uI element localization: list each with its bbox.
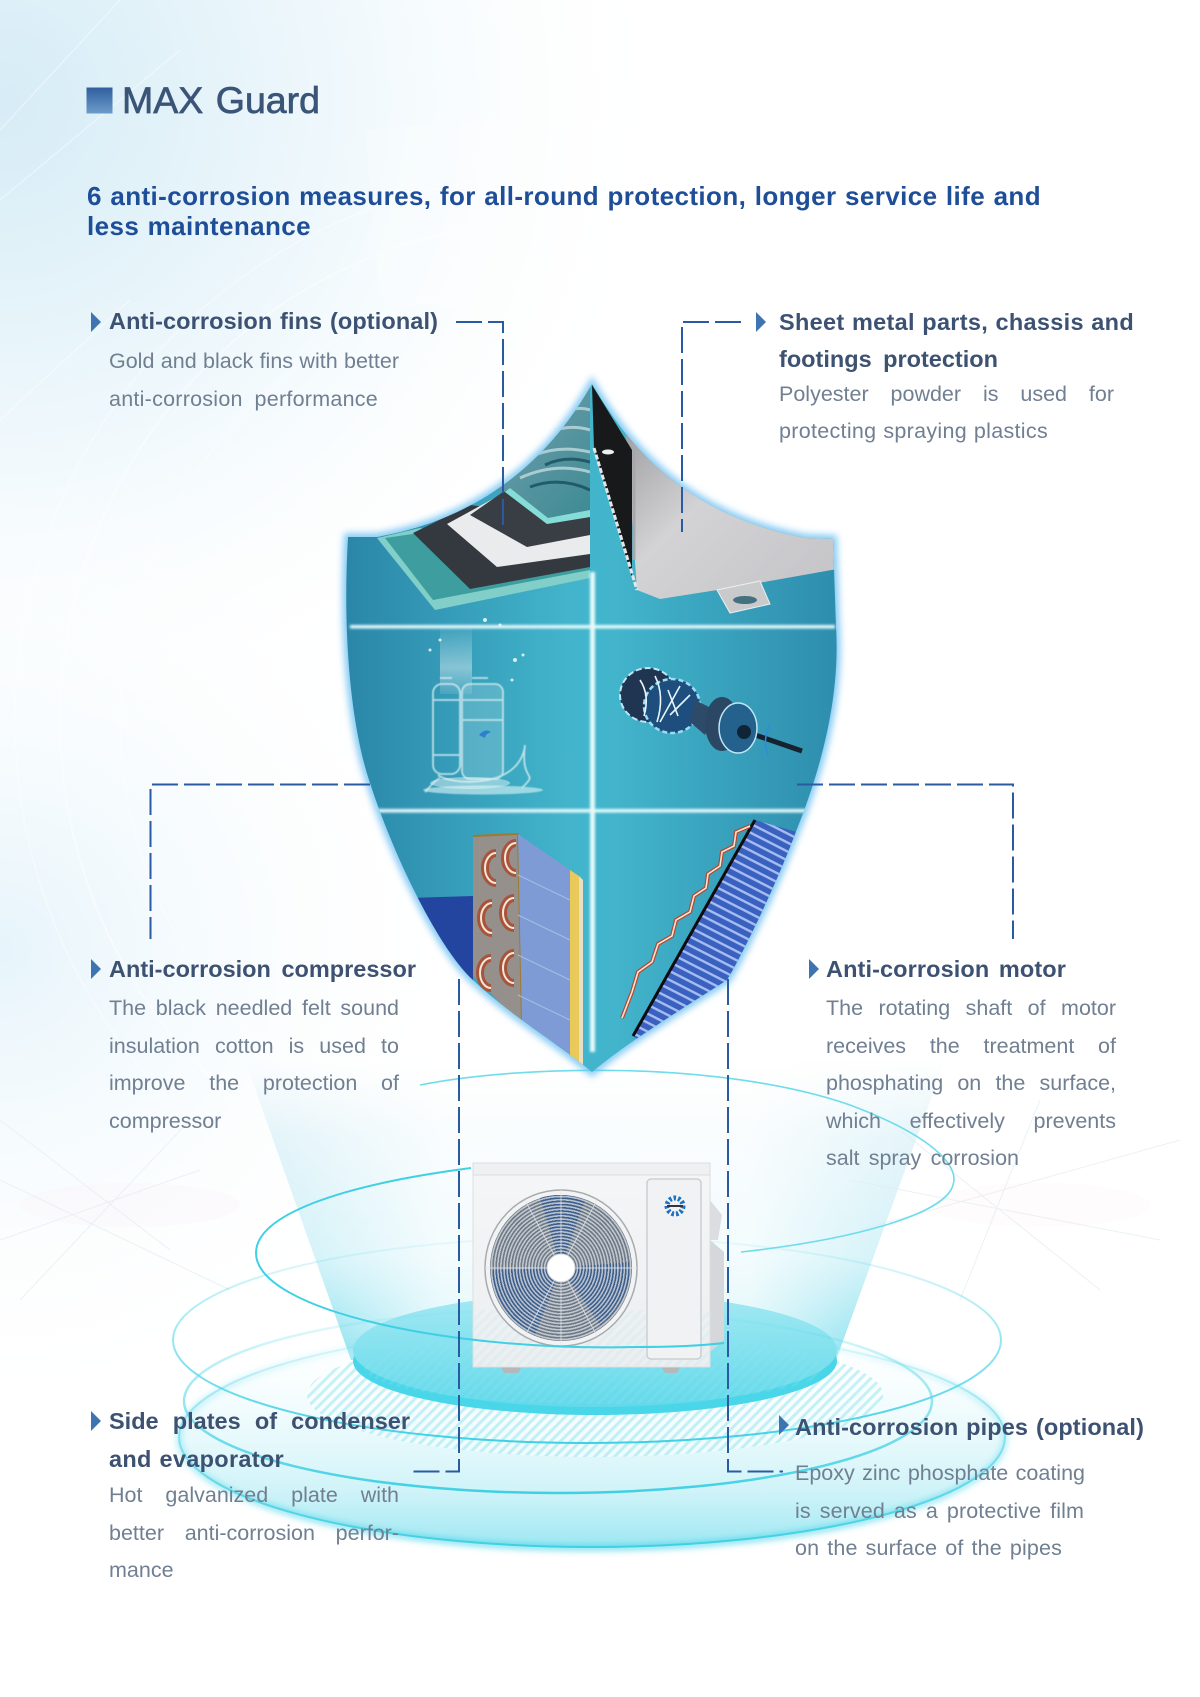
text block: pipes: Anti-corrosion pipes (optional) [795,1414,1144,1440]
cross lines [350,572,835,1052]
text block: compressor: improve the protection of [109,1071,399,1095]
arrow [779,1415,789,1435]
text block: sheet metal: Sheet metal parts, chassis and [779,309,1134,335]
panel: side plates coil [410,834,583,1068]
text block: side plates: Side plates of condenser [109,1408,410,1434]
text block: anti-corrosion fins: anti-corrosion performance [109,387,378,411]
arrow [91,312,101,332]
leader lines [150,322,1013,1472]
title marker [86,88,112,114]
subtitle: 6 anti-corrosion measures, for all-round protection, longer service life and [87,181,1041,211]
text block: motor: The rotating shaft of motor [826,996,1116,1020]
text block: side plates [91,1408,410,1582]
text block: side plates: and evaporator [109,1446,284,1472]
text block: pipes: is served as a protective film [795,1499,1084,1523]
text block: sheet metal: footings protection [779,346,998,372]
text block: side plates: Hot galvanized plate with [109,1483,399,1507]
feet [500,1366,522,1373]
leader: motor [797,784,1013,939]
ring inner [184,1309,932,1493]
arrow [756,312,766,332]
text block: sheet metal: Polyester powder is used for [779,382,1114,406]
shield [330,370,860,1100]
service panel [647,1179,701,1359]
hatched disc [307,1333,883,1457]
text block: compressor: compressor [109,1109,221,1133]
subtitle: less maintenance [87,211,311,241]
panel: motor [620,668,802,755]
leader: pipes [728,979,783,1472]
spiral rings [256,1070,954,1347]
text block: motor: phosphating on the surface, [826,1071,1116,1095]
text block: pipes: on the surface of the pipes [795,1536,1062,1560]
text block: motor: which effectively prevents [826,1109,1116,1133]
text block: motor [809,956,1116,1170]
panel: sheet metal [592,385,834,614]
leader: compressor [150,784,370,939]
panel: fins [377,370,590,610]
text block: anti-corrosion fins: Gold and black fins with better [109,349,399,373]
logo [667,1198,683,1214]
leader: fins [456,322,503,527]
title: MAX Guard [122,79,320,121]
text block: side plates: mance [109,1558,174,1582]
side parts [710,1200,722,1240]
panel: pipes condenser [620,819,796,1039]
leader: side plates [411,979,459,1472]
leader: sheet metal [682,322,741,532]
panel: compressor [423,618,543,794]
text block: pipes [779,1414,1144,1560]
arrow [91,1411,101,1431]
text block: compressor: insulation cotton is used to [109,1034,399,1058]
text block: sheet metal: protecting spraying plastics [779,419,1048,443]
outdoor unit [473,1163,724,1373]
text block: anti-corrosion fins: Anti-corrosion fins (optional) [109,308,438,334]
text block: motor: receives the treatment of [826,1034,1116,1058]
fan [485,1190,637,1346]
base disc [353,1293,837,1415]
shield glow [346,384,837,1072]
arrow [91,959,101,979]
text block: sheet metal [756,309,1134,443]
subtitle [87,181,1041,241]
ring large [173,1237,1001,1443]
outer glow disc [179,1327,1005,1548]
text block: compressor: The black needled felt sound [109,996,399,1020]
text block: compressor: Anti-corrosion compressor [109,956,416,982]
text block: motor: Anti-corrosion motor [826,956,1066,982]
text block: pipes: Epoxy zinc phosphate coating [795,1461,1085,1485]
arrow [809,959,819,979]
text block: compressor [91,956,416,1133]
text block: motor: salt spray corrosion [826,1146,1019,1170]
text block: side plates: better anti-corrosion perfor- [109,1521,399,1545]
text block: anti-corrosion fins [91,308,438,411]
light cone and base [173,1060,1005,1548]
